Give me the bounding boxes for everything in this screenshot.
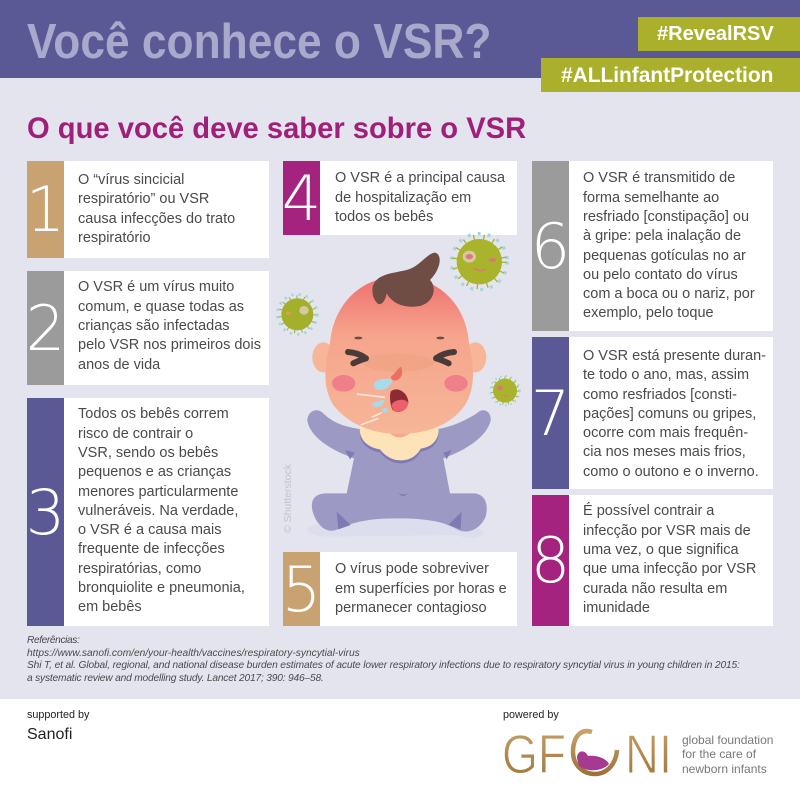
panel: fact 3: vulneráveis. Na verdade, [78, 503, 238, 519]
panel: fact 3: menores particularmente [78, 484, 238, 500]
panel: fact 2: crianças são infectadas [78, 318, 230, 334]
panel: fact 6: forma semelhante ao [583, 190, 719, 206]
panel: fact 2: comum, e quase todas as [78, 299, 244, 315]
panel: fact 8: imunidade [583, 600, 650, 616]
panel: fact 1: respiratório [78, 230, 151, 246]
hashtag: ALLinfantProtection [541, 58, 800, 92]
panel: fact 1: O “vírus sincicial [78, 172, 184, 188]
panel: fact 4: todos os bebês [335, 209, 433, 225]
icon: ears [312, 342, 486, 372]
panel: fact 6: resfriado [constipação] ou [583, 209, 749, 225]
panel: fact 5: permanecer contagioso [335, 600, 487, 616]
panel: fact 4: de hospitalização em [335, 190, 471, 206]
references: Referências: [27, 635, 79, 646]
image credit: © Shutterstock [282, 464, 294, 533]
logo infant [577, 751, 609, 770]
icon: nose [391, 367, 402, 381]
sponsor: Sanofi: Sanofi [27, 726, 72, 743]
icon: body [307, 410, 491, 532]
references: Shi T, et al. Global, regional, and national disease burden estimates of acute lower respiratory infections due to respiratory syncytial virus in young children in 2015: [27, 660, 740, 671]
panel: fact 4 [283, 161, 517, 235]
panel: fact 8: uma vez, o que significa [583, 542, 739, 558]
panel: fact 3: bronquiolite e pneumonia, [78, 580, 245, 596]
logo tagline: newborn infants [682, 762, 767, 776]
panel: fact 3 [27, 398, 269, 626]
icon: squeezed eyes [348, 352, 454, 363]
panel: fact 5 [283, 552, 517, 626]
shadow [307, 518, 483, 538]
panel: fact 6: à gripe: pela inalação de [583, 228, 741, 244]
panel: fact 3: frequente de infecções [78, 541, 225, 557]
panel: fact 2 [27, 271, 269, 385]
panel: fact 1: causa infecções do trato [78, 211, 235, 227]
icon: eyebrows [354, 337, 444, 339]
references: a systematic review and modelling study. Lancet 2017; 390: 946–58. [27, 673, 324, 684]
panel: fact 3: respiratórias, como [78, 561, 201, 577]
panel: fact 4: O VSR é a principal causa [335, 170, 505, 186]
panel: fact 8 [532, 495, 773, 626]
panel: fact 7: ocorre com mais frequên- [583, 425, 748, 441]
supported by: supported by [27, 709, 89, 721]
panel: fact 7: como resfriados [consti- [583, 387, 737, 403]
icon: neck [387, 430, 413, 438]
panel: fact 8: infecção por VSR mais de [583, 523, 751, 539]
references: https://www.sanofi.com/en/your-health/vaccines/respiratory-syncytial-virus [27, 648, 360, 659]
icon: nose shade [362, 354, 434, 372]
panel: fact 2: anos de vida [78, 357, 160, 373]
panel: fact 7: cia nos meses mais frios, [583, 444, 746, 460]
hashtag: RevealRSV: #RevealRSV [657, 23, 774, 45]
panel: fact 6: exemplo, pelo toque [583, 305, 714, 321]
logo: GFCNI [502, 723, 672, 780]
illustration: sick baby with viruses [276, 232, 521, 532]
powered by: powered by [503, 709, 559, 721]
icon: head [325, 277, 473, 434]
panel: fact 6: pequenas gotículas no ar [583, 248, 746, 264]
logo C ring [573, 731, 617, 774]
icon: left virus [277, 294, 317, 334]
header band [0, 0, 800, 78]
panel: fact 7: pações] comuns ou gripes, [583, 406, 756, 422]
icon: mouth [390, 389, 408, 412]
panel: fact 6 [532, 161, 773, 331]
icon: bib [360, 427, 439, 460]
panel: fact 8: curada não resulta em [583, 581, 727, 597]
panel: fact 8: que uma infecção por VSR [583, 561, 756, 577]
references [27, 635, 740, 684]
footer band [0, 699, 800, 800]
icon: cheeks [332, 375, 468, 392]
panel: fact 3: pequenos e as crianças [78, 464, 231, 480]
panel: fact 3: VSR, sendo os bebês [78, 445, 218, 461]
section heading: O que você deve saber sobre o VSR [27, 112, 526, 145]
panel: fact 6: O VSR é transmitido de [583, 170, 735, 186]
panel: fact 5: em superfícies por horas e [335, 581, 507, 597]
panel: fact 7 [532, 337, 773, 489]
panel: fact 3: Todos os bebês correm [78, 406, 229, 422]
panel: fact 7: te todo o ano, mas, assim [583, 367, 749, 383]
icon: large virus [451, 234, 507, 290]
panel: fact 6: com a boca ou o nariz, por [583, 286, 755, 302]
icon: bib shadow [360, 430, 439, 463]
panel: fact 7: O VSR está presente duran- [583, 348, 766, 364]
hashtag: ALLinfantProtection: #ALLinfantProtection [561, 64, 773, 87]
icon: hair [372, 253, 440, 307]
logo tagline: global foundation [682, 733, 773, 747]
panel: fact 1 [27, 161, 269, 258]
panel: fact 3: em bebês [78, 599, 142, 615]
icon: sneeze droplets [357, 379, 393, 425]
panel: fact 3: o VSR é a causa mais [78, 522, 221, 538]
panel: fact 6: ou pelo contato do vírus [583, 267, 738, 283]
panel: fact 2: pelo VSR nos primeiros dois [78, 337, 261, 353]
panel: fact 8: É possível contrair a [583, 503, 714, 519]
panel: fact 3: risco de contrair o [78, 426, 193, 442]
panel: fact 7: como o outono e o inverno. [583, 464, 759, 480]
panel: fact 2: O VSR é um vírus muito [78, 279, 234, 295]
panel: fact 1: respiratório” ou VSR [78, 191, 209, 207]
hashtag: RevealRSV [638, 17, 800, 51]
title: Você conhece o VSR? [27, 14, 491, 68]
logo tagline [682, 733, 773, 776]
logo tagline: for the care of [682, 747, 756, 761]
panel: fact 5: O vírus pode sobreviver [335, 561, 489, 577]
icon: right virus [490, 376, 520, 405]
